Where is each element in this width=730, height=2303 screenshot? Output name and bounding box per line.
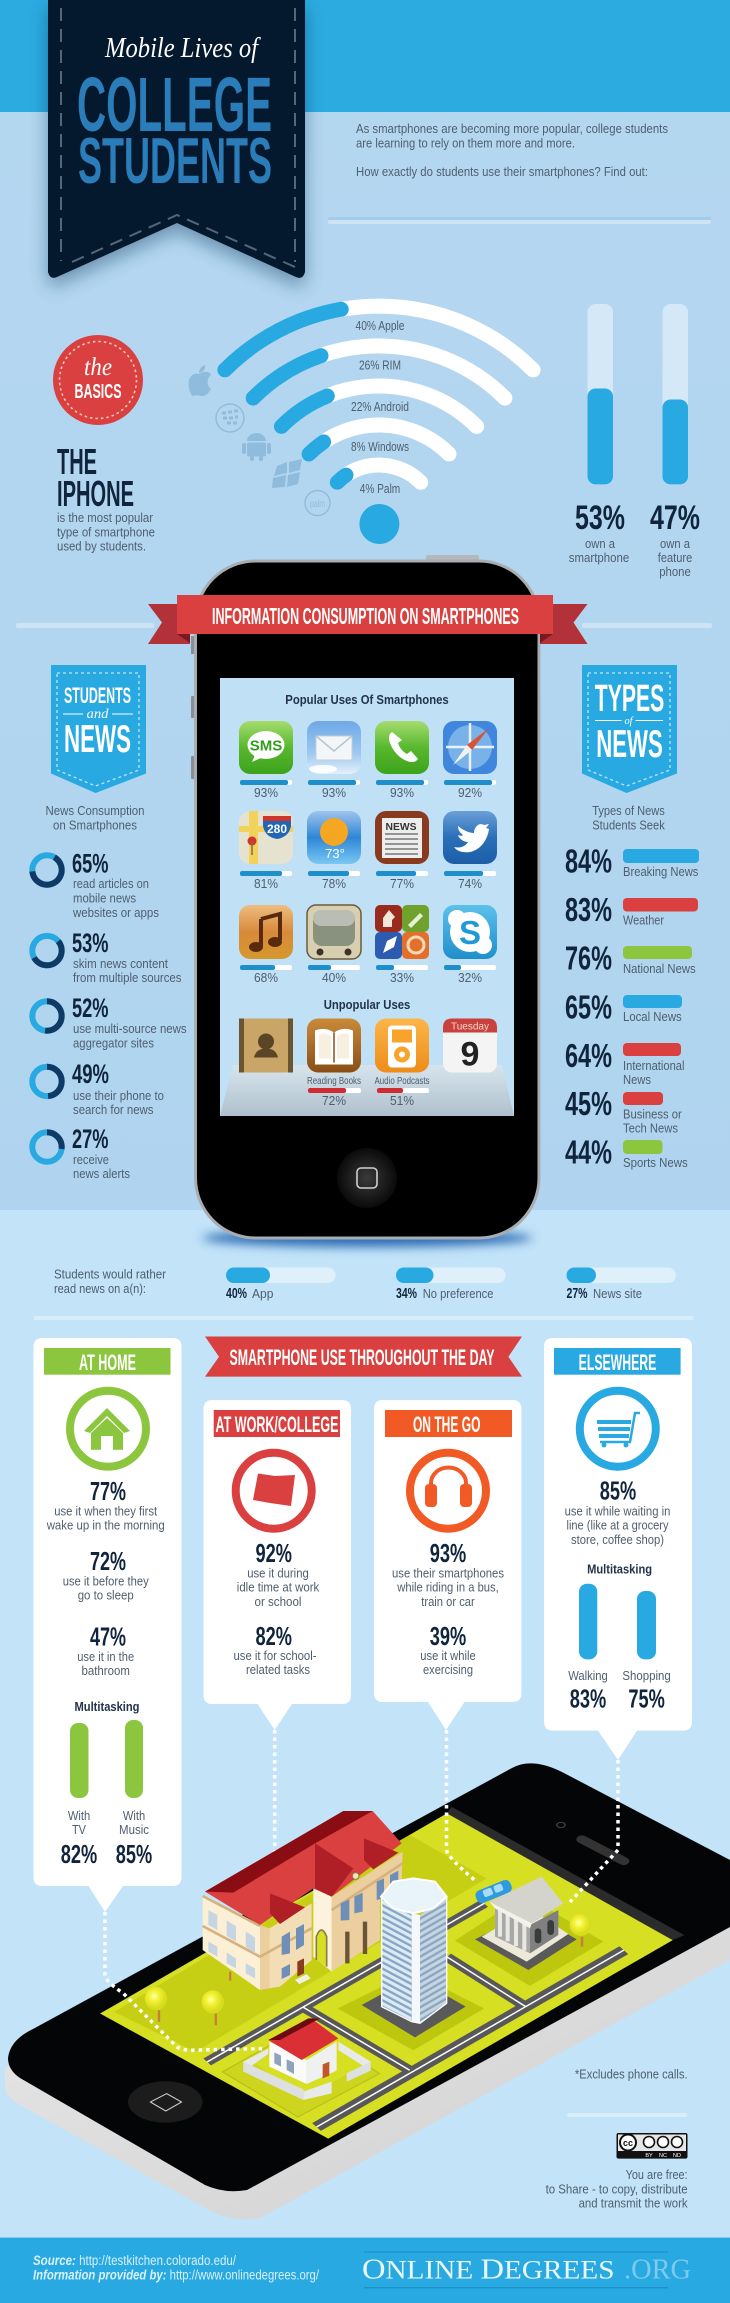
donut 52%: 52%	[72, 993, 108, 1023]
icon: mail	[307, 721, 361, 774]
footnote: *Excludes phone calls.	[575, 2066, 688, 2082]
footer sources	[33, 2253, 319, 2283]
panel: elsewhere: Multitasking	[587, 1562, 652, 1577]
online degrees logo: ONLINE DEGREES	[362, 2254, 614, 2286]
ribbon: smartphone use throughout the day	[205, 1336, 522, 1377]
the iphone text: used by students.	[57, 538, 146, 554]
license text: and transmit the work	[579, 2196, 688, 2211]
bars row 2: 74%	[458, 877, 482, 891]
icon: calendar: 9	[461, 1036, 479, 1074]
icon: podcasts	[375, 1018, 429, 1072]
icon: maps: 280	[267, 822, 287, 836]
panel: at home: Multitasking	[74, 1699, 140, 1714]
the basics badge: the	[84, 354, 112, 381]
panel: at home: use it before they	[63, 1574, 149, 1589]
online degrees logo: .ORG	[624, 2254, 691, 2286]
donut 53%: 53%	[72, 928, 108, 958]
flag: students and news	[51, 665, 146, 793]
panel: at home: 77%	[90, 1476, 126, 1506]
panel: on the go: ON THE GO	[413, 1412, 480, 1437]
unpopular labels and bars: Reading Books	[307, 1076, 361, 1087]
unpopular labels and bars: 72%	[322, 1094, 346, 1108]
bar chart: types of news: Tech News	[623, 1120, 678, 1136]
bar chart: types of news: 65%	[565, 988, 612, 1026]
icon: palm: palm	[310, 499, 325, 510]
panel: elsewhere: Shopping	[622, 1668, 671, 1683]
bar chart: types of news: National News	[623, 961, 696, 976]
bars row 1: 92%	[458, 786, 482, 800]
icon: music	[239, 905, 293, 959]
news consumption donut list	[26, 848, 187, 1181]
panel: at work college: 82%	[255, 1621, 292, 1651]
screen heading: popular uses: Popular Uses Of Smartphones	[285, 692, 449, 707]
wifi chart: smartphone market share: 26% RIM	[359, 358, 401, 372]
panel: at home: Music	[119, 1822, 149, 1837]
icon: news: NEWS	[386, 821, 416, 833]
wifi chart: smartphone market share: 8% Windows	[351, 440, 409, 454]
types of news subheading	[592, 803, 665, 832]
donut 49%: 49%	[72, 1059, 109, 1089]
creative commons badge: NC	[659, 2153, 667, 2159]
trees	[145, 1987, 224, 2025]
panel: elsewhere: store, coffee shop)	[571, 1532, 664, 1547]
flag: students and news: NEWS	[64, 718, 131, 761]
icon: home	[70, 1391, 146, 1467]
building: tower	[362, 1878, 466, 2037]
panel: at work college: or school	[254, 1594, 302, 1609]
wifi chart: smartphone market share: 4% Palm	[360, 482, 400, 496]
bar chart: types of news: Local News	[623, 1009, 682, 1024]
bars row 2	[240, 871, 496, 891]
chart: own smartphone vs feature phone: phone	[659, 564, 691, 579]
panel: at work college: idle time at work	[237, 1580, 320, 1595]
chart: own smartphone vs feature phone: 53%	[575, 499, 625, 537]
panel: on the go: train or car	[421, 1594, 475, 1609]
read news preference: Students would rather	[54, 1266, 167, 1282]
bar chart: types of news: Weather	[623, 912, 665, 928]
roads	[207, 1903, 624, 2127]
bar chart: types of news: International	[623, 1058, 685, 1073]
panel: elsewhere: Walking	[568, 1668, 608, 1683]
donut 52%: aggregator sites	[73, 1036, 154, 1050]
chart: own smartphone vs feature phone: own a	[660, 536, 691, 551]
panel: at work college: use it for school-	[234, 1648, 316, 1663]
panel: on the go: while riding in a bus,	[396, 1580, 499, 1595]
panel: at home: With	[68, 1808, 90, 1823]
speaker and camera	[582, 1839, 624, 1861]
read news preference: 34%	[396, 1285, 417, 1302]
icon: headphones	[410, 1453, 486, 1529]
bar chart: types of news: Sports News	[623, 1155, 688, 1170]
icon: contacts	[239, 1018, 293, 1072]
panel: at home: With	[123, 1808, 145, 1823]
panel: at home: 47%	[90, 1622, 126, 1652]
bars row 3: 32%	[458, 971, 482, 985]
news consumption subheading: on Smartphones	[53, 818, 137, 832]
footer sources: Source: http://testkitchen.colorado.edu/	[33, 2253, 236, 2268]
panel: elsewhere: 85%	[600, 1476, 636, 1506]
donut 49%	[32, 1059, 164, 1117]
unpopular labels and bars	[307, 1076, 430, 1108]
bar chart: types of news: 44%	[565, 1134, 612, 1170]
donut 27%: news alerts	[73, 1166, 130, 1181]
creative commons badge	[616, 2133, 688, 2159]
panel: at home	[34, 1338, 182, 1912]
panel: at work college: use it during	[247, 1566, 309, 1580]
flag: types of news: of	[624, 715, 634, 727]
wifi chart: smartphone market share: 40% Apple	[356, 319, 405, 333]
panel: at home: 85%	[116, 1839, 152, 1869]
bars row 3	[240, 965, 496, 985]
panel: elsewhere: 83%	[570, 1684, 606, 1714]
footer	[0, 2238, 730, 2303]
donut 53%	[26, 928, 182, 985]
the iphone text: type of smartphone	[57, 524, 155, 540]
icon: android	[242, 433, 271, 461]
types of news subheading: Students Seek	[592, 818, 665, 832]
home button	[128, 2081, 203, 2123]
icon: calendar: Tuesday	[451, 1022, 489, 1032]
donut 53%: from multiple sources	[73, 970, 182, 985]
chart: own smartphone vs feature phone	[569, 304, 700, 579]
bars row 1: 93%	[254, 786, 278, 800]
panel: at home: TV	[72, 1822, 86, 1837]
icon: calendar	[443, 1018, 497, 1074]
bars row 1	[240, 780, 496, 800]
icon: books	[307, 1018, 361, 1072]
bar chart: types of news: 83%	[565, 891, 612, 928]
panel: at home: 82%	[61, 1839, 97, 1869]
icon: youtube	[307, 905, 361, 959]
license text	[546, 2167, 688, 2211]
bars row 1: 93%	[390, 786, 414, 800]
read news preference	[54, 1266, 676, 1302]
read news preference: read news on a(n):	[54, 1281, 146, 1296]
bars row 2: 78%	[322, 877, 346, 891]
icon: cart	[580, 1391, 656, 1467]
the iphone text: THE	[57, 441, 97, 482]
screen heading: unpopular uses: Unpopular Uses	[324, 997, 410, 1012]
wifi chart: smartphone market share	[189, 306, 533, 544]
bars row 3: 68%	[254, 971, 278, 985]
donut 65%: mobile news	[73, 890, 136, 906]
icon: windows	[272, 459, 302, 488]
bars row 3: 33%	[390, 971, 414, 985]
panel: at work college: related tasks	[246, 1662, 310, 1677]
tree	[570, 1914, 592, 1947]
icon: blackberry	[216, 404, 244, 432]
flag: types of news: NEWS	[596, 723, 663, 766]
panel: on the go: 39%	[430, 1621, 466, 1651]
read news preference: News site	[593, 1286, 642, 1301]
donut 53%: skim news content	[73, 956, 168, 971]
panel: at work college: AT WORK/COLLEGE	[216, 1412, 338, 1437]
panel: on the go	[374, 1400, 521, 1730]
panel: at home: use it when they first	[54, 1504, 158, 1518]
donut 65%: 65%	[72, 848, 108, 878]
icon: phone	[375, 721, 429, 774]
icon: games	[375, 905, 429, 959]
the basics badge: BASICS	[74, 381, 122, 403]
donut 49%: use their phone to	[73, 1088, 164, 1103]
panel: at home: go to sleep	[78, 1588, 134, 1603]
ribbon: information consumption	[148, 595, 588, 644]
panel: elsewhere: use it while waiting in	[565, 1504, 670, 1518]
dotted connector lines	[105, 1730, 618, 2050]
icon: twitter	[443, 811, 497, 864]
title script: Mobile Lives of	[104, 33, 261, 64]
isometric phone	[5, 1763, 730, 2219]
icon: maps	[239, 811, 293, 864]
panel: on the go: use their smartphones	[392, 1566, 504, 1580]
bar chart: types of news: 45%	[565, 1085, 612, 1122]
bars row 2: 81%	[254, 877, 278, 891]
flag: types of news	[582, 665, 677, 793]
online degrees logo	[362, 2252, 691, 2288]
title: students: STUDENTS	[78, 124, 272, 197]
bar chart: types of news: Breaking News	[623, 864, 699, 879]
intro text: How exactly do students use their smartphones? Find out:	[356, 164, 648, 179]
bar chart: types of news: News	[623, 1072, 651, 1087]
bars row 1: 93%	[322, 786, 346, 800]
read news preference: 40%	[226, 1285, 247, 1302]
panel: on the go: exercising	[423, 1662, 473, 1677]
unpopular labels and bars: 51%	[390, 1094, 414, 1108]
bar chart: types of news: 84%	[565, 842, 612, 880]
bar chart: types of news: Business or	[623, 1106, 682, 1122]
donut 27%: receive	[73, 1152, 109, 1167]
news consumption subheading: News Consumption	[46, 803, 144, 818]
panel: elsewhere: ELSEWHERE	[579, 1350, 656, 1375]
isometric buildings: tower, college and house	[203, 1811, 466, 2100]
bar chart: types of news	[565, 842, 699, 1170]
license text: You are free:	[626, 2167, 688, 2182]
donut 27%	[32, 1124, 130, 1181]
intro text: As smartphones are becoming more popular, college students	[356, 121, 668, 136]
flag: students and news: STUDENTS	[64, 683, 131, 708]
chart: own smartphone vs feature phone: 47%	[650, 499, 700, 537]
panel: at work college	[204, 1400, 351, 1730]
wifi chart: smartphone market share: 22% Android	[351, 400, 409, 414]
icon: skype	[443, 905, 497, 959]
bar chart: types of news: 76%	[565, 940, 612, 976]
the iphone text: is the most popular	[57, 510, 154, 525]
chart: own smartphone vs feature phone: smartphone	[569, 550, 629, 565]
icon: book	[236, 1453, 312, 1529]
home button	[337, 1148, 397, 1208]
central phone	[191, 555, 539, 1247]
the iphone text	[57, 441, 155, 554]
panel: on the go: 93%	[430, 1538, 466, 1568]
chart: own smartphone vs feature phone: feature	[658, 550, 692, 565]
creative commons badge: BY	[645, 2153, 653, 2159]
panel: at home: bathroom	[82, 1663, 130, 1678]
isometric buildings: bank, tree and car	[455, 1877, 603, 1986]
icon: sms: SMS	[250, 738, 282, 754]
map base	[447, 1807, 684, 1940]
building: college	[203, 1811, 403, 1990]
donut 65%: websites or apps	[72, 905, 159, 920]
read news preference: No preference	[423, 1286, 494, 1301]
read news preference: 27%	[566, 1285, 588, 1302]
bars row 2: 77%	[390, 877, 414, 891]
donut 27%: 27%	[72, 1124, 108, 1154]
donut 52%	[32, 993, 187, 1050]
the basics badge	[53, 335, 143, 425]
panel: elsewhere: line (like at a grocery	[566, 1518, 669, 1533]
creative commons badge: cc	[623, 2138, 633, 2148]
icon: sms	[239, 721, 293, 774]
icon: weather	[307, 811, 361, 864]
icon: news	[375, 811, 429, 864]
panel: at home: 72%	[90, 1546, 126, 1576]
chart: own smartphone vs feature phone: own a	[585, 536, 616, 551]
the iphone text: IPHONE	[57, 473, 134, 514]
building: house	[243, 2018, 371, 2100]
license text: to Share - to copy, distribute	[546, 2182, 688, 2197]
donut 65%	[27, 848, 159, 920]
panel: on the go: use it while	[420, 1648, 476, 1663]
bar chart: types of news: 64%	[565, 1037, 612, 1074]
panel: elsewhere: 75%	[628, 1684, 665, 1714]
icon: skype: S	[459, 914, 481, 951]
panel: at home: wake up in the morning	[46, 1518, 165, 1533]
intro text: are learning to rely on them more and more.	[356, 136, 575, 150]
flag: students and news: and	[86, 707, 110, 722]
news consumption subheading	[46, 803, 144, 832]
footer sources: Information provided by: http://www.onlinedegrees.org/	[33, 2268, 319, 2283]
panel: at home: AT HOME	[79, 1350, 136, 1375]
read news preference: App	[252, 1286, 273, 1301]
donut 52%: use multi-source news	[73, 1021, 187, 1036]
icon: palm	[305, 490, 330, 516]
icon: weather: 73°	[325, 846, 345, 861]
title: college: COLLEGE	[77, 62, 272, 148]
title banner	[48, 0, 305, 286]
building: bank	[475, 1877, 577, 1970]
intro text	[356, 121, 668, 179]
creative commons badge: ND	[673, 2153, 681, 2159]
types of news subheading: Types of News	[592, 803, 665, 818]
phone screen	[220, 678, 514, 1116]
unpopular labels and bars: Audio Podcasts	[374, 1076, 430, 1087]
flag: types of news: TYPES	[595, 678, 664, 720]
donut 49%: search for news	[73, 1102, 154, 1117]
car	[474, 1878, 513, 1905]
panel: at home: use it in the	[77, 1649, 134, 1664]
panel: at work college: 92%	[255, 1538, 292, 1568]
panel: elsewhere	[544, 1338, 692, 1760]
donut 65%: read articles on	[73, 876, 149, 891]
icon: apple	[189, 365, 211, 396]
ribbon: smartphone use throughout the day: SMARTPHONE USE THROUGHOUT THE DAY	[230, 1345, 495, 1370]
icon: safari	[443, 721, 497, 774]
bars row 3: 40%	[322, 971, 346, 985]
